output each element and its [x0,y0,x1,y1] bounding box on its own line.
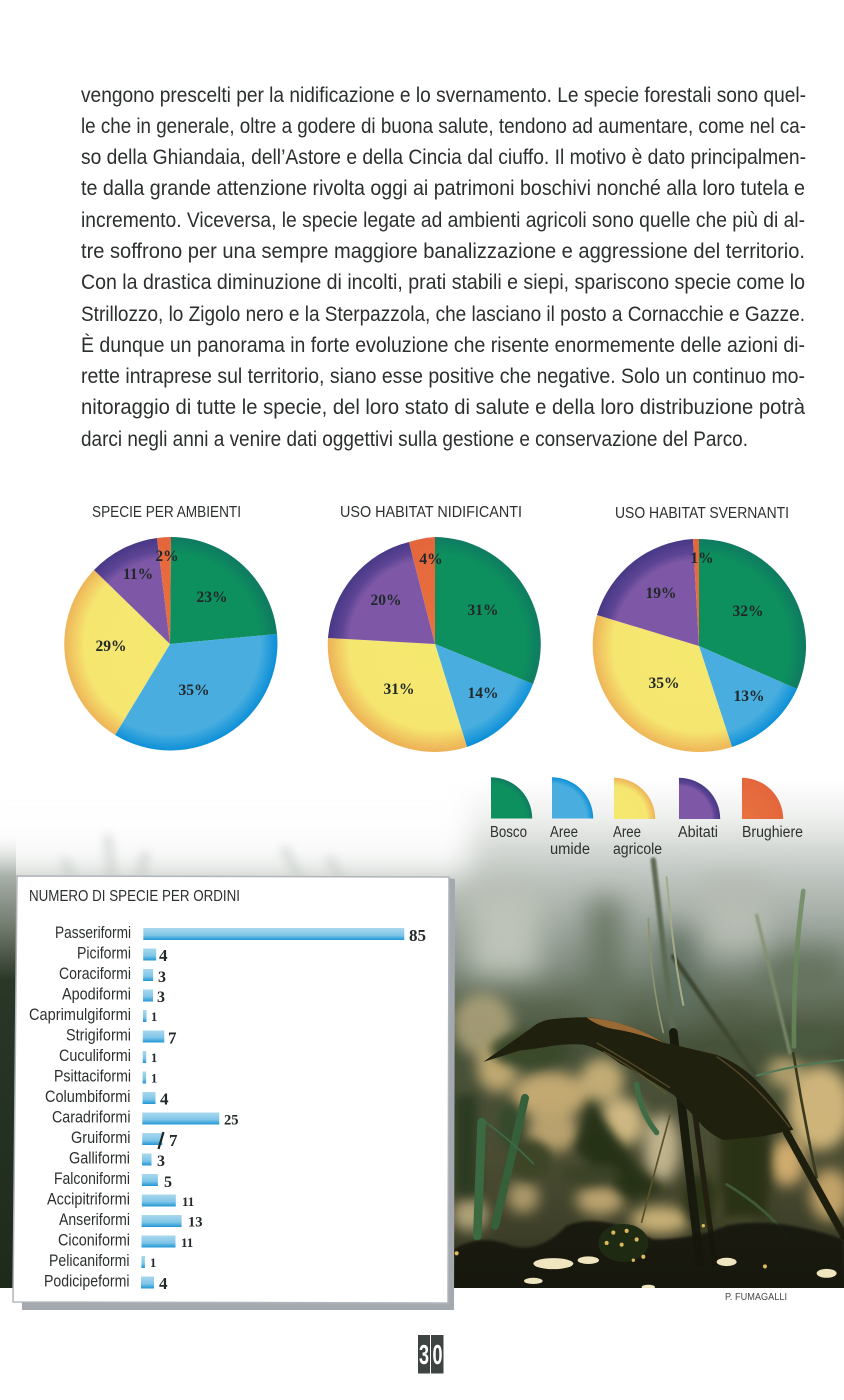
photo credit: P. FUMAGALLI [725,1291,787,1303]
bar chart rows: Accipitriformi [47,1190,130,1208]
pie chart: uso habitat nidificanti: 31% [468,602,498,619]
body text: Con la drastica diminuzione di incolti, prati stabili e siepi, spariscono specie come lo [81,271,805,294]
bar chart rows: Caprimulgiformi [29,1006,131,1024]
bar chart rows: 4 [160,1090,169,1108]
panel card [13,876,449,1303]
body text [81,84,806,451]
bar chart rows: 25 [224,1112,238,1128]
panel: numero di specie per ordini [13,876,455,1310]
bar chart rows [29,924,426,1293]
bar chart rows: 3 [157,1153,165,1170]
legend item: abitati: Abitati [678,824,718,841]
bar chart rows: Cuculiformi [59,1047,131,1065]
bar chart rows: Ciconiformi [58,1232,130,1250]
slash mark over the gruiformi bar [158,1132,164,1149]
bar chart rows: Columbiformi [45,1088,130,1106]
pie chart: uso habitat nidificanti: 4% [419,551,443,568]
pie chart: specie per ambienti: 23% [196,589,228,606]
bar chart rows: Piciformi [77,944,131,962]
panel heading: NUMERO DI SPECIE PER ORDINI [29,888,240,905]
bar chart rows: 13 [188,1214,202,1230]
pie chart: uso habitat nidificanti: 14% [468,685,498,702]
bar chart rows: 11 [181,1235,193,1250]
body text: te dalla grande attenzione rivolta oggi ai patrimoni boschivi nonché alla loro tutela e [81,177,805,200]
pie chart: uso habitat svernanti: 1% [690,550,714,567]
background photo: bird among reeds [0,760,844,1290]
pie chart: uso habitat svernanti [593,505,806,752]
pie chart: specie per ambienti: 35% [178,682,210,699]
body text: tre soffrono per una sempre maggiore banalizzazione e aggressione del territorio. [81,240,805,263]
heading: uso habitat nidificanti: USO HABITAT NIDIFICANTI [340,504,522,521]
pie chart: uso habitat svernanti: 13% [734,688,764,705]
legend item: abitati [678,778,720,841]
body text: È dunque un panorama in forte evoluzione che risente enormemente delle azioni di- [81,334,805,357]
bar chart rows: 85 [409,926,426,945]
bar chart rows: 1 [151,1072,157,1086]
bar chart rows: Gruiformi [71,1129,130,1147]
legend item: aree umide: Aree [550,824,578,841]
bird crest [587,1017,664,1043]
pie chart: uso habitat svernanti: 35% [648,675,680,692]
bar chart rows: 5 [164,1174,172,1191]
legend item: aree agricole [613,778,662,858]
pie chart: specie per ambienti: 29% [96,638,126,655]
legend item: brughiere [742,778,803,841]
bar chart rows: 3 [157,989,165,1006]
bird silhouette [483,1017,793,1140]
body text: nitoraggio di tutte le specie, del loro stato di salute e della loro distribuzione potrà [81,396,805,419]
body text: rette intraprese sul territorio, siano esse positive che negative. Solo un continuo mo- [81,365,805,388]
pie chart: specie per ambienti: 2% [155,548,179,565]
pie chart: uso habitat nidificanti [328,504,541,752]
ground foliage [453,1221,844,1290]
heading: uso habitat svernanti: USO HABITAT SVERNANTI [615,505,789,522]
bar chart rows: 4 [159,946,168,965]
bar chart rows: Psittaciformi [54,1068,131,1086]
pie chart: specie per ambienti: 11% [123,566,153,583]
legend item: aree agricole: agricole [613,841,662,858]
pie chart: uso habitat nidificanti: 20% [370,592,402,609]
bar chart rows: 11 [182,1194,194,1209]
body text: darci negli anni a venire dati oggettivi sulla gestione e conservazione del Parco. [81,428,748,451]
bar chart rows: 7 [169,1131,178,1150]
legend item: brughiere: Brughiere [742,824,803,841]
legend item: aree umide: umide [550,841,590,858]
panel shadow [22,878,455,1310]
bar chart rows: Anseriformi [59,1211,130,1229]
legend item: bosco [490,777,532,841]
bar chart rows: 1 [151,1051,157,1065]
bar chart rows: 4 [159,1274,168,1293]
bar chart rows: 1 [151,1010,157,1024]
pie chart: uso habitat svernanti: 32% [732,603,764,620]
page number [418,1335,444,1374]
bar chart rows: Galliformi [69,1150,130,1168]
bar chart rows: Caradriformi [52,1108,130,1126]
bar chart rows: Coraciformi [59,965,131,983]
bar chart rows: 7 [168,1028,177,1048]
bar chart rows: Strigiformi [66,1026,131,1044]
page number: 0 [432,1339,442,1370]
legend item: aree agricole: Aree [613,824,641,841]
bar chart rows: Podicipeformi [44,1272,130,1290]
bar chart rows: Pelicaniformi [49,1252,130,1270]
legend item: bosco: Bosco [490,824,527,841]
pie chart: uso habitat nidificanti: 31% [384,681,414,698]
pie chart: specie per ambienti [64,504,277,750]
reeds, bird and ground, drawn in a 3x crop coordinate space [453,860,844,1290]
legend [490,777,803,858]
bar chart rows: 1 [150,1256,156,1270]
heading: specie per ambienti: SPECIE PER AMBIENTI [92,504,241,521]
bar chart rows: Passeriformi [55,924,131,942]
bar chart rows: 3 [158,969,166,986]
pie chart: uso habitat svernanti: 19% [646,585,676,602]
bar chart rows: Apodiformi [62,986,131,1004]
page number: 3 [419,1339,429,1370]
bar chart rows: Falconiformi [54,1170,130,1188]
legend item: aree umide [550,777,593,858]
